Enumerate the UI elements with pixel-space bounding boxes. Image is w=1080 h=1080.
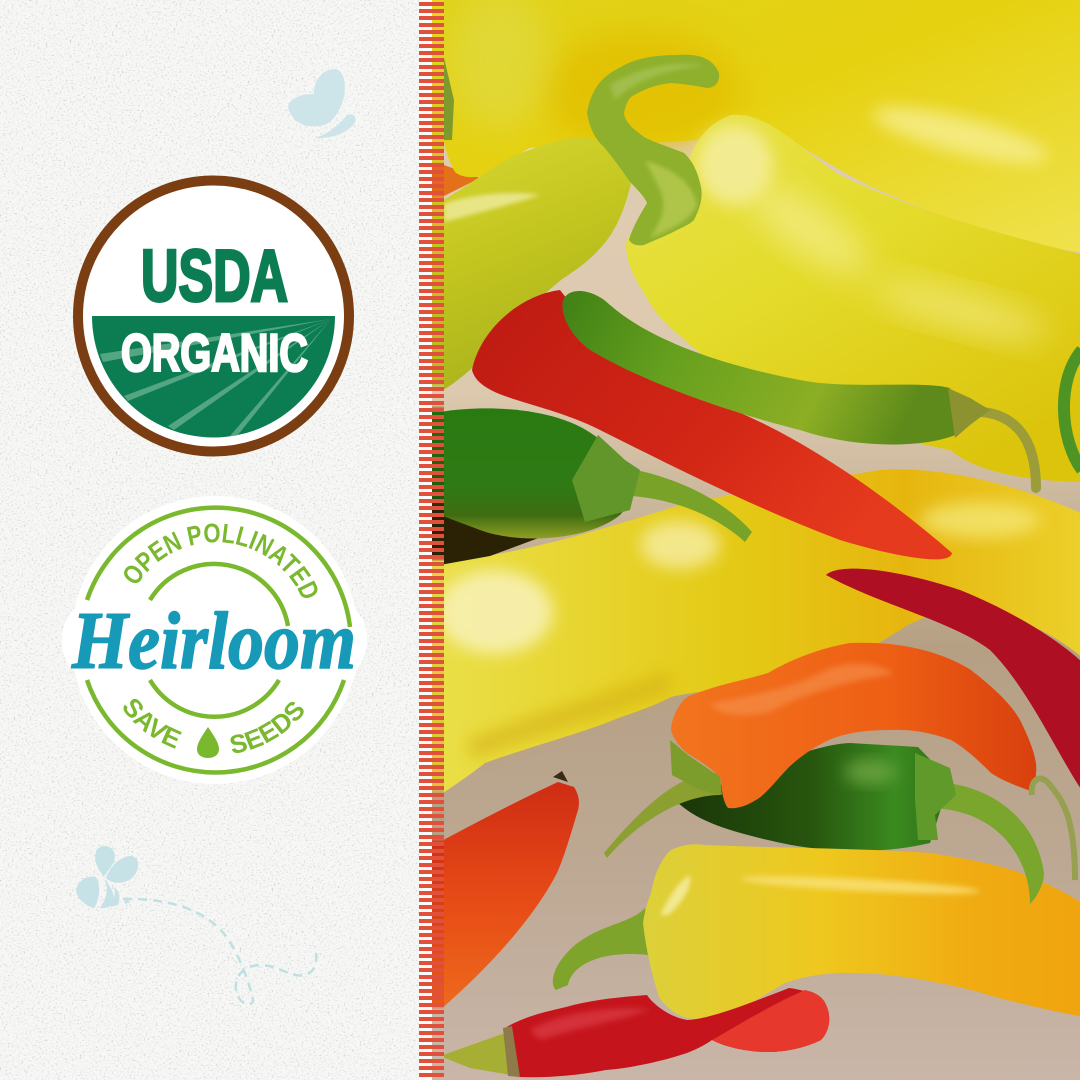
SEEDS arc text: SEEDS — [230, 702, 304, 753]
USDA wordmark: USDA — [141, 236, 288, 317]
yellow pepper: large center with stem — [587, 55, 1080, 482]
green chili with stem — [562, 291, 1036, 488]
dark shadow under green pepper — [444, 516, 538, 564]
dark green pepper stem and calyx — [915, 753, 1044, 904]
red pepper: long — [472, 290, 952, 559]
dark green pepper — [675, 743, 950, 851]
green stem: right edge — [1064, 350, 1080, 470]
Heirloom script wordmark: Heirloom — [71, 595, 356, 686]
bee flight path — [123, 899, 316, 1004]
icon: butterfly — [288, 69, 356, 138]
pepper stem — [587, 55, 719, 245]
green stem: lower right — [1032, 778, 1075, 880]
yellow pepper: upper left — [440, 137, 631, 392]
seal field rays — [100, 319, 331, 436]
seed drop icon — [197, 727, 219, 758]
SAVE arc text: SAVE — [124, 698, 182, 749]
OPEN POLLINATED arc text: OPEN POLLINATED — [124, 524, 318, 598]
panel: fabric background — [0, 0, 432, 1080]
yellow pepper: top — [430, 0, 1080, 252]
white cloth sliver — [520, 147, 537, 154]
yellow pepper: large lower — [437, 469, 1080, 795]
decorative stripe band — [419, 0, 444, 1080]
seal ring — [78, 180, 349, 452]
badge: heirloom seal — [62, 496, 367, 784]
green pepper: left with stem — [440, 408, 752, 542]
bee wings and body — [76, 846, 138, 908]
photo backdrop — [444, 115, 1080, 1080]
dark red chili — [826, 569, 1080, 795]
ORGANIC wordmark: ORGANIC — [121, 324, 308, 383]
red chili: bottom with stem — [440, 988, 829, 1077]
red pepper: left bottom — [440, 771, 579, 1010]
panel: pepper photograph — [430, 0, 1080, 1080]
orange pepper with stem — [604, 643, 1036, 858]
seal white backing — [62, 496, 367, 784]
seal green field — [92, 316, 335, 438]
badge: USDA organic seal — [78, 180, 349, 452]
icon: bee with dashed flight path — [76, 846, 316, 1004]
yellow pepper: bottom with stem — [553, 844, 1080, 1019]
seal rings — [87, 508, 350, 773]
